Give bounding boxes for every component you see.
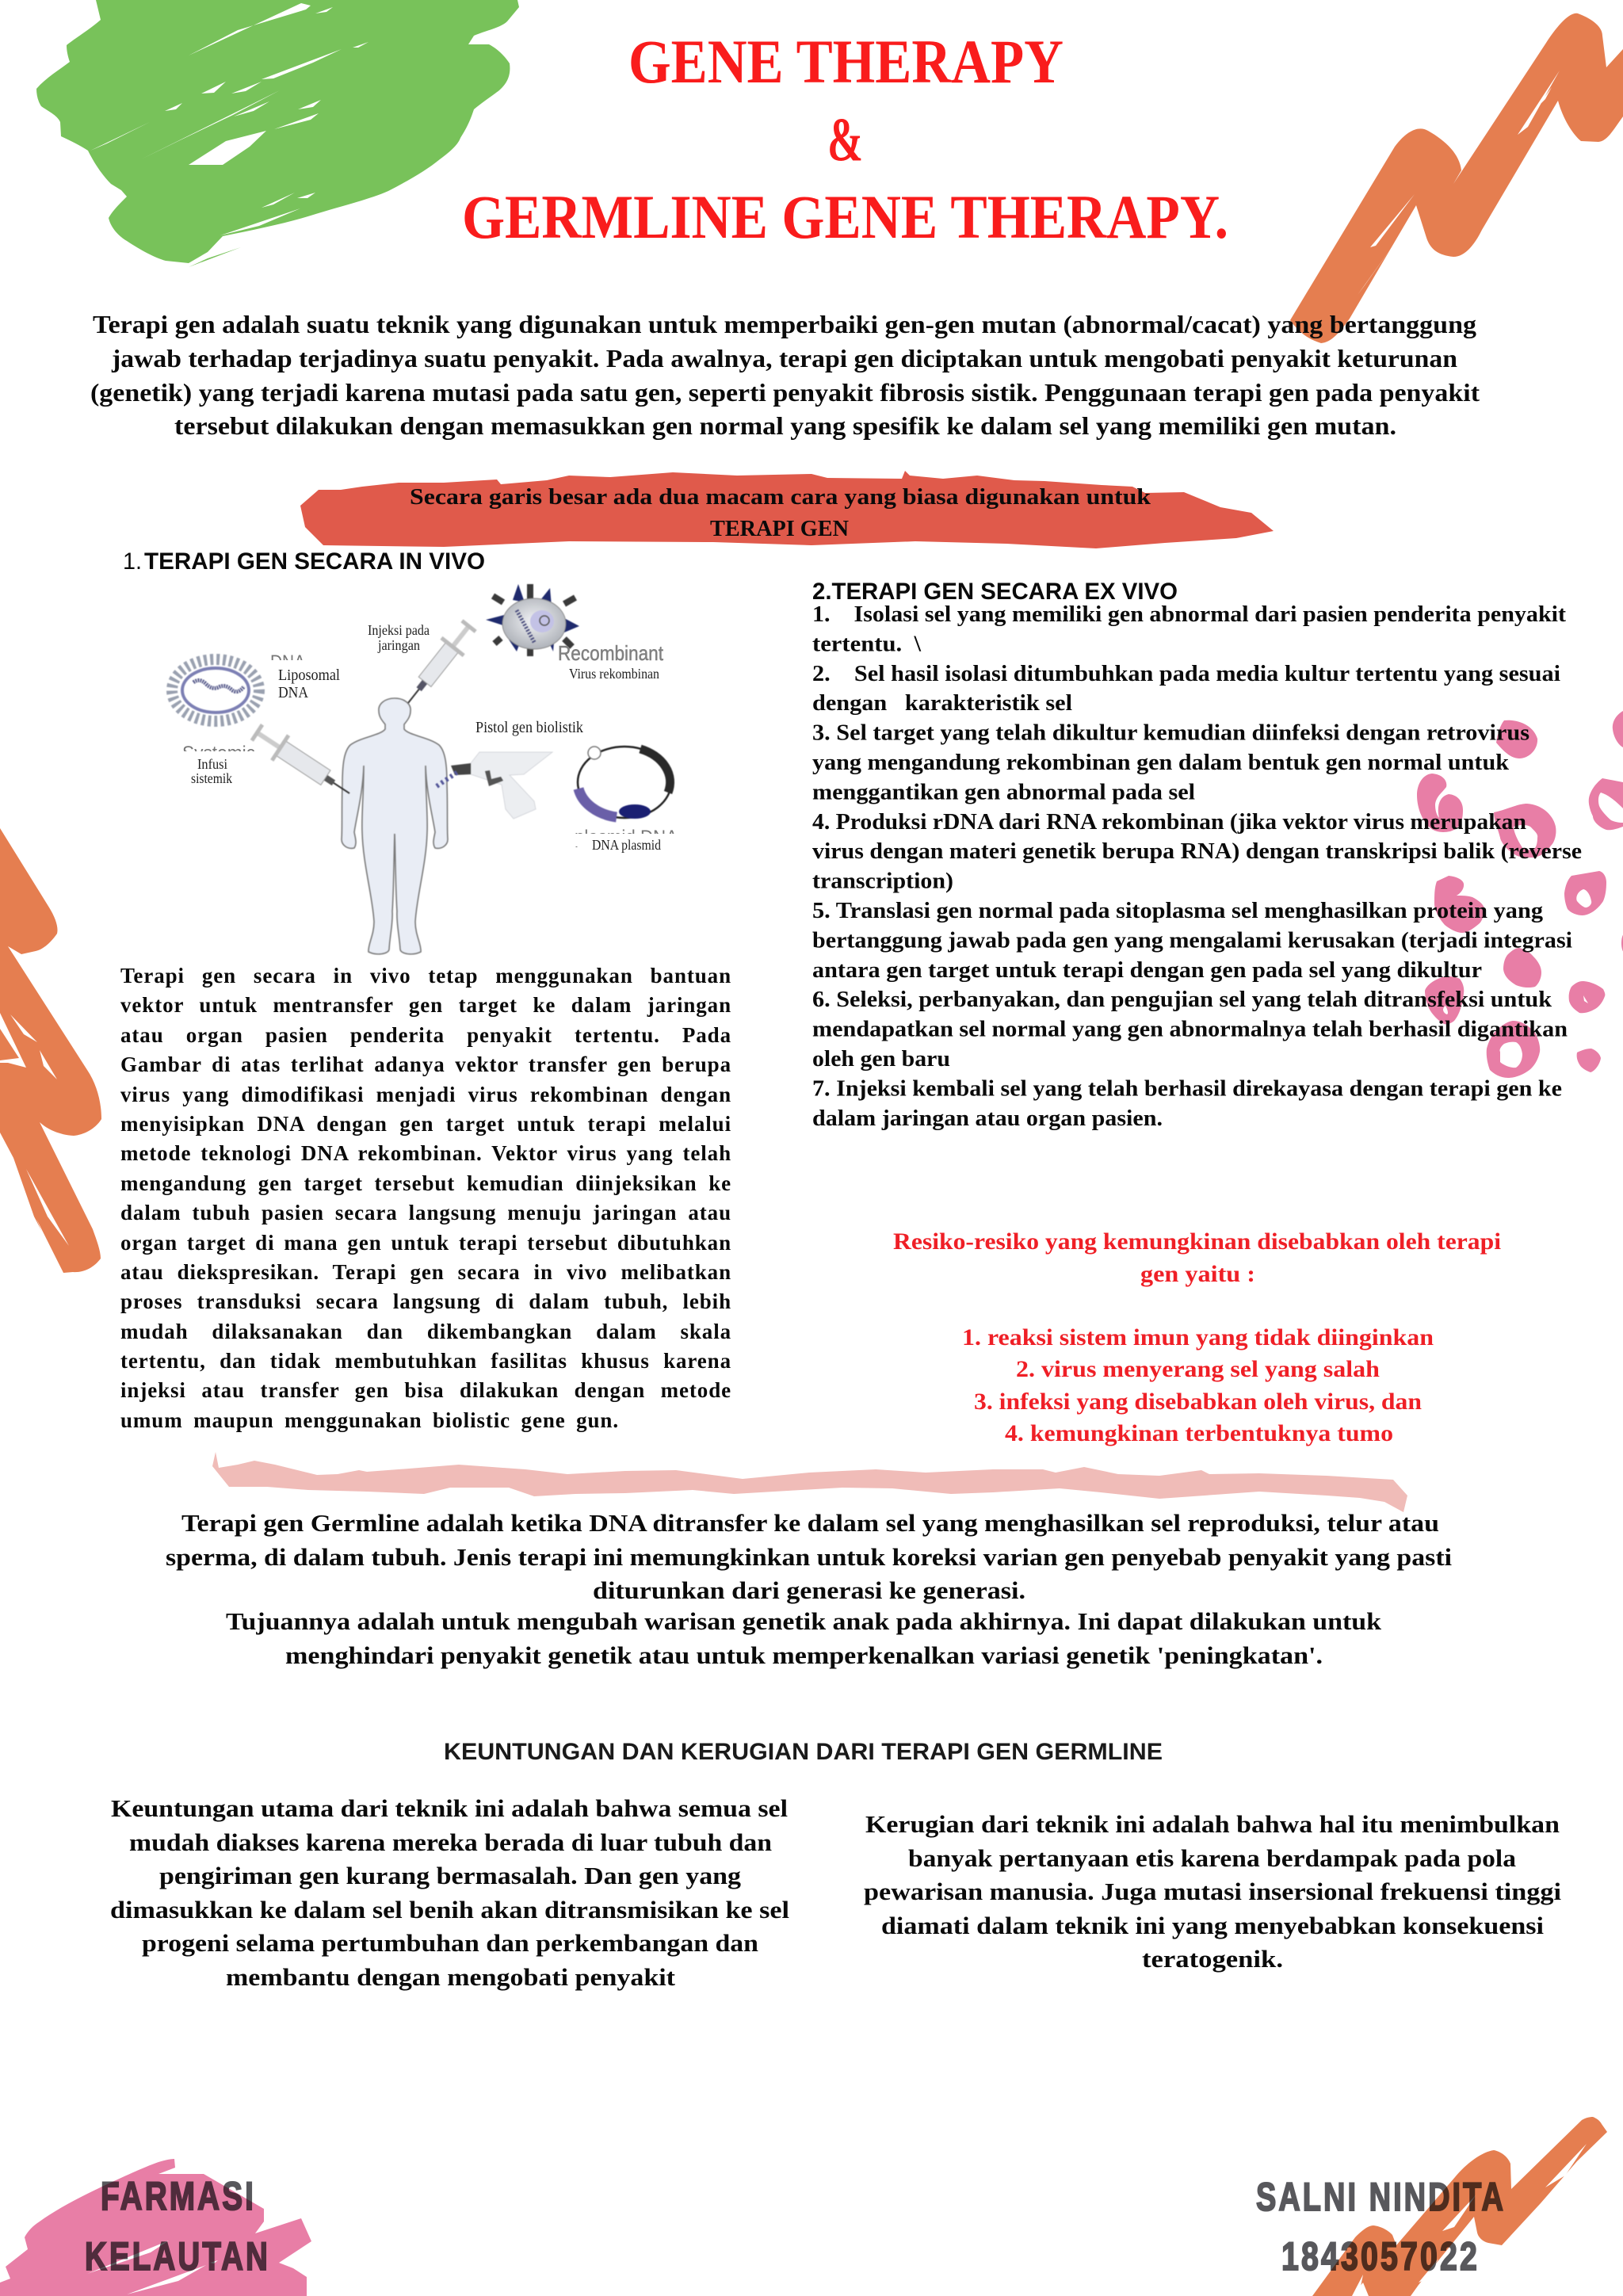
ex vivo steps list: oleh gen baru [812,1047,950,1072]
diagram labels: Infusi [197,756,227,772]
intro paragraph: jawab terhadap terjadinya suatu penyakit. Pada awalnya, terapi gen diciptakan untuk mengobati penyakit keturunan [111,344,1457,372]
diagram labels: Virus rekombinan [569,666,659,682]
ex vivo steps list: transcription) [812,869,953,894]
germline paragraph: sperma, di dalam tubuh. Jenis terapi ini memungkinkan untuk koreksi varian gen penyebab penyakit yang pasti [166,1543,1452,1571]
intro paragraph: Terapi gen adalah suatu teknik yang digunakan untuk memperbaiki gen-gen mutan (abnormal/cacat) yang bertanggung [93,310,1476,338]
ex vivo steps list: mendapatkan sel normal yang gen abnormalnya telah berhasil digantikan [812,1018,1568,1042]
footer: author: SALNI NINDITA [1256,2175,1506,2219]
title: GENE THERAPY [628,27,1064,96]
risks list in red: Resiko-resiko yang kemungkinan disebabkan oleh terapi [893,1228,1501,1255]
orange brush left edge [0,828,101,1273]
risks list in red: 1. reaksi sistem imun yang tidak diinginkan [962,1324,1434,1350]
in vivo paragraph: atau diekspresikan. Terapi gen secara in vivo melibatkan [120,1260,731,1284]
clipped source labels: plasmid DNA [575,827,678,848]
in vivo paragraph: organ target di mana gen untuk terapi tersebut dibutuhkan [120,1231,731,1255]
advantages column [110,1794,789,1991]
advantages column: Keuntungan utama dari teknik ini adalah bahwa semua sel [111,1794,788,1822]
heading: advantages and disadvantages: KEUNTUNGAN DAN KERUGIAN DARI TERAPI GEN GERMLINE [444,1739,1163,1765]
ex vivo steps list: yang mengandung rekombinan gen dalam bentuk gen normal untuk [812,751,1509,775]
risks list in red: gen yaitu : [1140,1261,1255,1287]
footer: faculty [85,2174,270,2279]
pink cell shapes right side [1417,711,1623,1078]
syringe: systemic [247,719,357,806]
disadvantages column: Kerugian dari teknik ini adalah bahwa hal itu menimbulkan [865,1810,1560,1838]
ex vivo steps list: 2. Sel hasil isolasi ditumbuhkan pada media kultur tertentu yang sesuai [812,662,1560,686]
risks list in red: 4. kemungkinan terbentuknya tumo [1005,1420,1393,1446]
banner text: Secara garis besar ada dua macam cara yang biasa digunakan untuk [410,484,1151,510]
heading: in vivo: 1. [123,548,142,575]
advantages column: dimasukkan ke dalam sel benih akan ditransmisikan ke sel [110,1896,789,1924]
clipped source labels [179,651,680,848]
ex vivo steps list: 4. Produksi rDNA dari RNA rekombinan (jika vektor virus merupakan [812,810,1526,835]
human body [342,698,448,954]
ex vivo steps list: dengan karakteristik sel [812,691,1072,716]
intro paragraph: tersebut dilakukan dengan memasukkan gen normal yang spesifik ke dalam sel yang memiliki gen mutan. [174,411,1396,440]
orange zigzag brush top right [1290,13,1623,343]
clipped source labels: Systemic [182,743,255,764]
recombinant virus [486,584,579,656]
risks list in red: 2. virus menyerang sel yang salah [1016,1356,1380,1382]
plasmid [578,747,671,819]
ex vivo steps list: 7. Injeksi kembali sel yang telah berhasil direkayasa dengan terapi gen ke [812,1076,1562,1101]
footer: faculty: FARMASI [101,2174,256,2218]
in vivo paragraph: mudah dilaksanakan dan dikembangkan dalam skala [120,1320,731,1343]
diagram labels: Injeksi pada [368,622,430,638]
in vivo paragraph: Terapi gen secara in vivo tetap menggunakan bantuan [120,964,731,988]
germline paragraph: Tujuannya adalah untuk mengubah warisan genetik anak pada akhirnya. Ini dapat dilakukan untuk [226,1607,1382,1635]
disadvantages column: pewarisan manusia. Juga mutasi insersional frekuensi tinggi [864,1878,1561,1905]
diagram labels: DNA plasmid [592,837,661,853]
risks list in red: 3. infeksi yang disebabkan oleh virus, dan [974,1389,1422,1415]
banner text: TERAPI GEN [710,516,849,541]
intro paragraph [90,310,1480,440]
in vivo paragraph: metode teknologi DNA rekombinan. Vektor virus yang telah [120,1141,731,1165]
orange brush bottom right [1312,2117,1607,2296]
advantages column: membantu dengan mengobati penyakit [226,1963,676,1991]
in vivo paragraph [120,964,731,1432]
liposome [172,659,259,721]
clipped source labels: DNA [270,651,305,673]
title: & [827,105,863,174]
green brush stroke [36,0,519,267]
advantages column: pengiriman gen kurang bermasalah. Dan gen yang [159,1862,742,1889]
risks list in red [893,1228,1501,1446]
in vivo paragraph: tertentu, dan tidak membutuhkan fasilitas khusus karena [120,1349,731,1373]
advantages column: mudah diakses karena mereka berada di luar tubuh dan [129,1828,772,1856]
germline paragraph [166,1509,1452,1669]
diagram labels: DNA [278,684,308,701]
diagram labels: Recombinant [558,641,664,665]
diagram: in vivo gene delivery [172,584,680,954]
in vivo paragraph: dalam tubuh pasien secara langsung menuju jaringan atau [120,1201,731,1224]
pale pink divider stroke [212,1452,1407,1512]
in vivo paragraph: vektor untuk mentransfer gen target ke dalam jaringan [120,993,731,1017]
heading: in vivo: TERAPI GEN SECARA IN VIVO [144,548,485,575]
gene gun [437,752,552,819]
ex vivo steps list: 5. Translasi gen normal pada sitoplasma sel menghasilkan protein yang [812,899,1543,923]
title: GERMLINE GENE THERAPY. [462,182,1228,251]
in vivo paragraph: atau organ pasien penderita penyakit tertentu. Pada [120,1023,731,1047]
ex vivo steps list [812,602,1582,1131]
in vivo paragraph: proses transduksi secara langsung di dalam tubuh, lebih [120,1289,731,1313]
diagram labels [191,622,664,853]
syringe: tissue injection [397,616,481,712]
title [462,27,1228,251]
germline paragraph: menghindari penyakit genetik atau untuk memperkenalkan variasi genetik 'peningkatan'. [285,1641,1323,1669]
in vivo paragraph: umum maupun menggunakan biolistic gene gun. [120,1408,619,1432]
in vivo paragraph: injeksi atau transfer gen bisa dilakukan dengan metode [120,1378,731,1402]
footer: faculty: KELAUTAN [85,2234,270,2279]
heading: ex vivo: 2.TERAPI GEN SECARA EX VIVO [812,579,1178,605]
diagram labels: Pistol gen biolistik [475,719,583,736]
germline paragraph: Terapi gen Germline adalah ketika DNA ditransfer ke dalam sel yang menghasilkan sel reproduksi, telur atau [181,1509,1439,1537]
ex vivo steps list: antara gen target untuk terapi dengan gen pada sel yang dikultur [812,958,1482,983]
ex vivo steps list: dalam jaringan atau organ pasien. [812,1106,1163,1131]
ex vivo steps list: menggantikan gen abnormal pada sel [812,780,1195,804]
ex vivo steps list: tertentu. \ [812,632,922,656]
ex vivo steps list: bertanggung jawab pada gen yang mengalami kerusakan (terjadi integrasi [812,928,1572,953]
in vivo paragraph: mengandung gen target tersebut kemudian diinjeksikan ke [120,1171,731,1195]
ex vivo steps list: 6. Seleksi, perbanyakan, dan pengujian sel yang telah ditransfeksi untuk [812,988,1552,1012]
ex vivo steps list: 1. Isolasi sel yang memiliki gen abnormal dari pasien penderita penyakit [812,602,1567,627]
disadvantages column: teratogenik. [1142,1945,1283,1973]
disadvantages column: banyak pertanyaan etis karena berdampak pada pola [908,1844,1517,1872]
diagram labels: jaringan [377,637,420,653]
germline paragraph: diturunkan dari generasi ke generasi. [593,1576,1025,1604]
footer: author: 1843057022 [1281,2234,1480,2279]
disadvantages column [864,1810,1561,1973]
ex vivo steps list: 3. Sel target yang telah dikultur kemudian diinfeksi dengan retrovirus [812,721,1529,746]
diagram labels: sistemik [191,770,232,786]
pink brush bottom left [0,2159,311,2296]
advantages column: progeni selama pertumbuhan dan perkembangan dan [142,1929,758,1957]
in vivo paragraph: Gambar di atas terlihat adanya vektor transfer gen berupa [120,1052,731,1076]
red banner [300,471,1274,548]
in vivo paragraph: virus yang dimodifikasi menjadi virus rekombinan dengan [120,1083,731,1106]
intro paragraph: (genetik) yang terjadi karena mutasi pada satu gen, seperti penyakit fibrosis sistik. Penggunaan terapi gen pada penyakit [90,378,1480,407]
banner text [410,484,1151,541]
footer: author [1256,2175,1506,2279]
diagram labels: Liposomal [278,667,340,684]
ex vivo steps list: virus dengan materi genetik berupa RNA) dengan transkripsi balik (reverse [812,839,1582,864]
disadvantages column: diamati dalam teknik ini yang menyebabkan konsekuensi [881,1912,1544,1939]
in vivo paragraph: menyisipkan DNA dengan gen target untuk terapi melalui [120,1112,731,1136]
